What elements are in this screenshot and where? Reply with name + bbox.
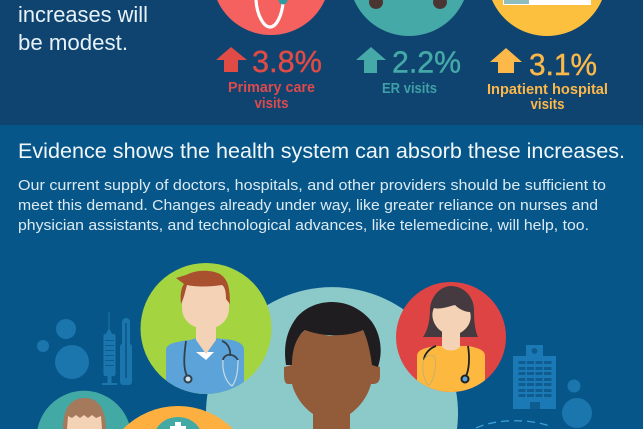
icon: inpatient circle with hospital bed [492, 0, 602, 36]
intro text: increases will [18, 2, 148, 27]
illustration: provider in teal circle [38, 391, 130, 429]
nurse face [182, 282, 229, 329]
stat: ER visits [356, 44, 461, 97]
arrow: up teal [356, 47, 386, 73]
intro text [18, 2, 148, 55]
doctor face [432, 305, 471, 335]
heading: Evidence shows the health system can absorb these increases. [18, 140, 625, 163]
stat: inpatient hospital visits: Inpatient hospital [487, 81, 608, 98]
doctor hair [423, 286, 478, 337]
stat: ER visits: ER visits [382, 80, 437, 97]
nurse neck [196, 325, 216, 354]
icon: syringe [102, 312, 117, 385]
nurse scrubs [166, 338, 244, 394]
body text: physician assistants, and technological advances, like telemedicine, will help, too. [18, 217, 589, 234]
man hair [285, 302, 381, 367]
doctor top [417, 346, 485, 392]
arrow: up yellow [490, 48, 522, 73]
stat: inpatient hospital visits: visits [530, 96, 564, 113]
illustration: telemedicine in orange circle [123, 406, 233, 429]
nurse stethoscope [184, 341, 238, 386]
stat: ER visits: 2.2% [392, 44, 461, 80]
arrow: up red [216, 47, 247, 72]
icon: primary care circle with stethoscope [217, 0, 325, 35]
body text: Our current supply of doctors, hospitals, and other providers should be sufficient to [18, 177, 606, 194]
panel: evidence [18, 142, 624, 429]
provider face [66, 414, 103, 429]
stat: primary care visits: Primary care [228, 79, 315, 96]
icon: hospital building [513, 345, 556, 409]
illustration: nurse in green circle [140, 263, 272, 394]
doctor stethoscope [423, 346, 469, 385]
body text: meet this demand. Changes already under way, like greater reliance on nurses and [18, 197, 598, 214]
illustration: central provider [206, 287, 458, 429]
icon: ER circle with ambulance wheels [354, 0, 464, 36]
nurse v-neck [196, 352, 214, 360]
icon: decorative bubbles left [37, 319, 89, 379]
icon: decorative bubbles right [562, 380, 592, 428]
man face and neck [284, 330, 380, 429]
provider hair [63, 398, 106, 429]
stat: primary care visits: 3.8% [252, 44, 322, 79]
nurse hair [176, 271, 230, 304]
body text [18, 177, 606, 234]
icon: white cross [170, 422, 186, 429]
stat: primary care visits: visits [254, 95, 288, 112]
icon: thermometer [120, 318, 132, 385]
illustration: doctor in red circle [396, 282, 506, 392]
stat: primary care visits [216, 44, 322, 112]
icon: dashed signal arc [476, 421, 552, 428]
stat: inpatient hospital visits: 3.1% [529, 47, 597, 82]
panel: projected visit increases [0, 0, 643, 125]
intro text: be modest. [18, 30, 128, 55]
doctor neck [442, 330, 460, 350]
stat: inpatient hospital visits [487, 47, 608, 113]
